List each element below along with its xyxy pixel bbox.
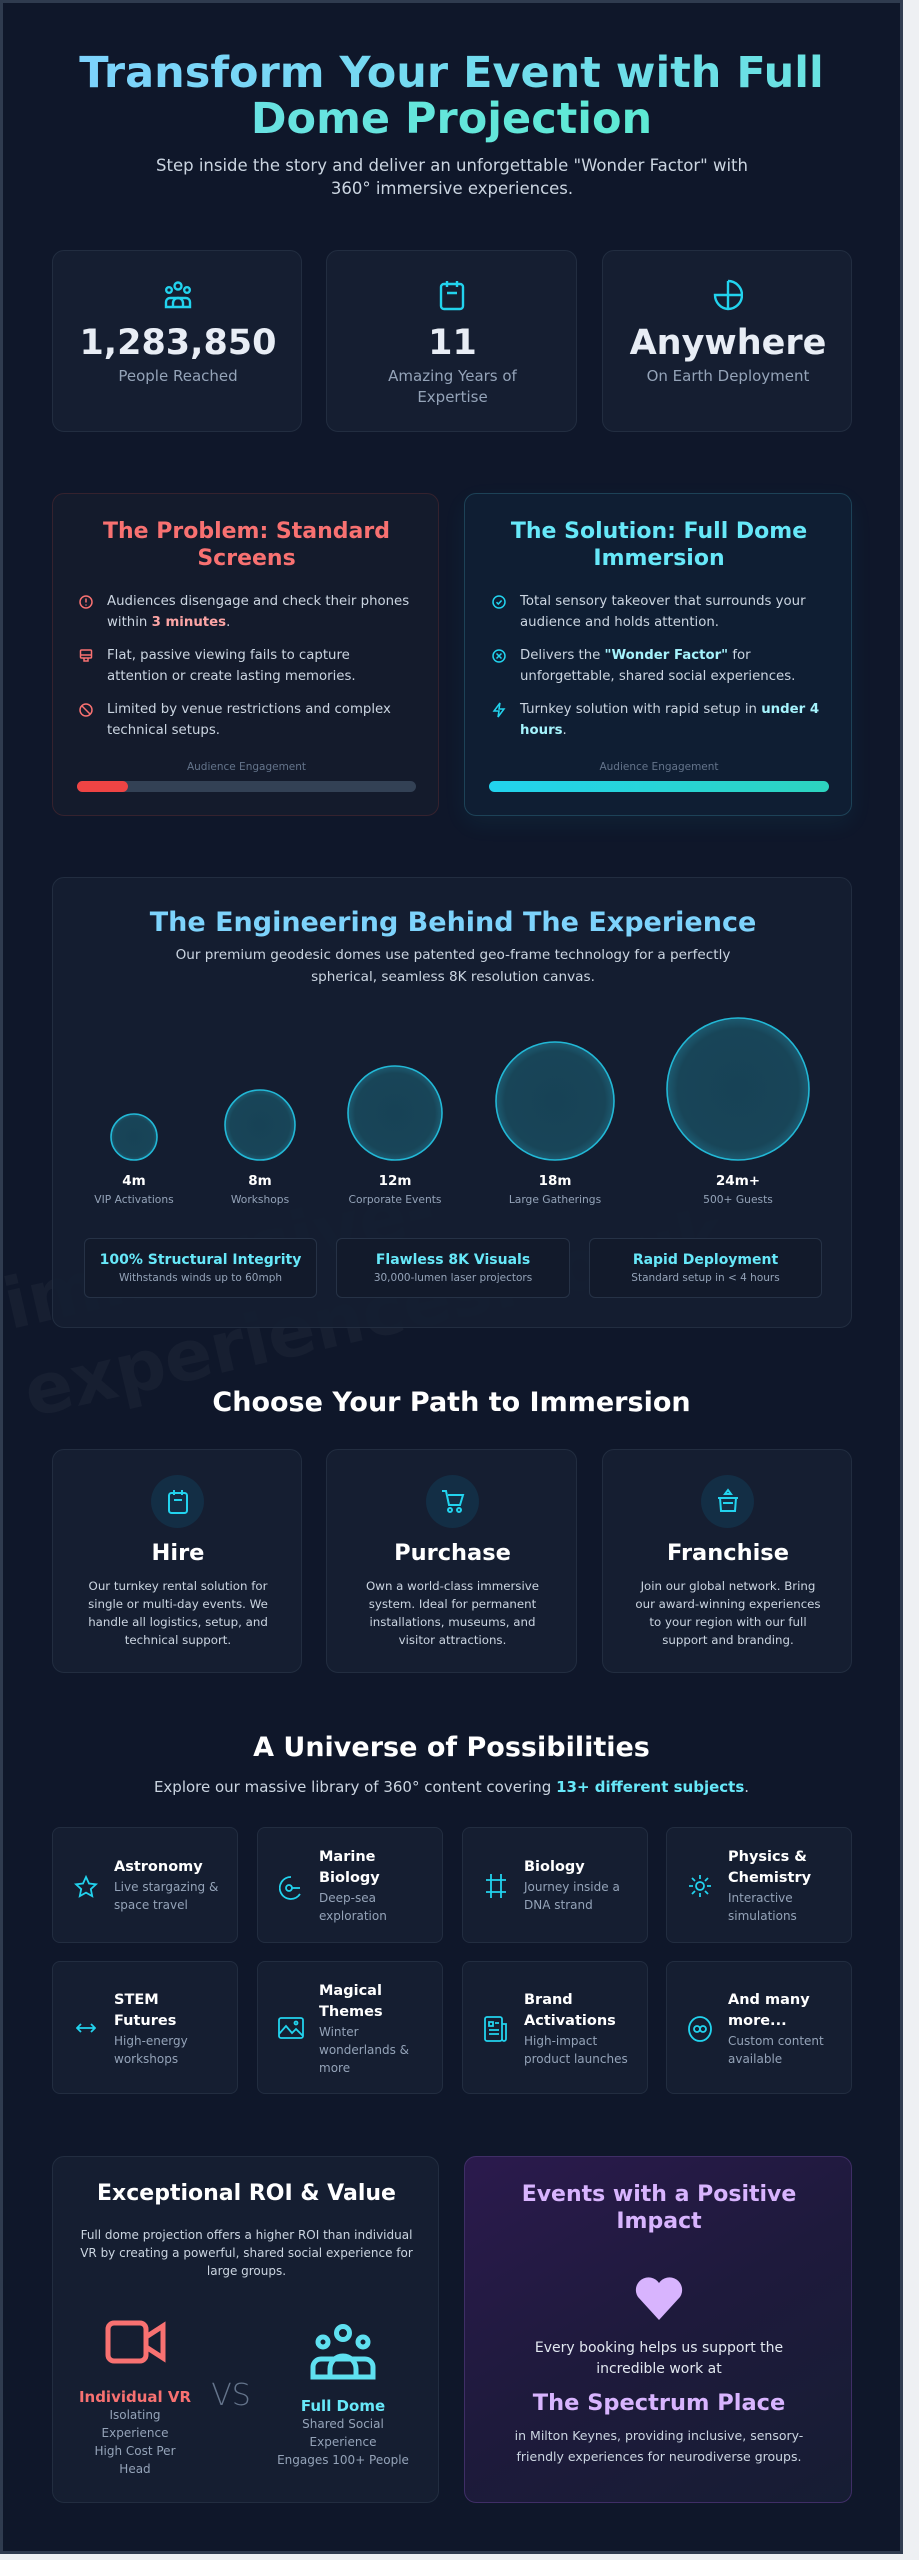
description: in Milton Keynes, providing inclusive, sensory- xyxy=(515,2428,803,2443)
label: Amazing Years of Expertise xyxy=(388,367,517,406)
subject: magical themes: Winter xyxy=(319,2025,359,2039)
title: Dome Projection xyxy=(251,94,652,144)
label: People Reached xyxy=(118,367,238,385)
number: 11 xyxy=(428,323,477,363)
subtitle xyxy=(156,156,748,198)
dome size chart: Corporate Events xyxy=(348,1193,442,1206)
feature: visuals xyxy=(336,1238,570,1298)
description: friendly experiences for neurodiverse groups. xyxy=(516,2449,801,2464)
description xyxy=(635,1579,821,1647)
description xyxy=(515,2428,803,2464)
icon: heart xyxy=(636,2277,682,2320)
engagement bar: Audience Engagement xyxy=(187,761,306,773)
subject: physics xyxy=(666,1827,852,1943)
item 1: Audiences disengage and check their phones within 3 minutes. xyxy=(107,594,409,630)
subject: brand activations: product launches xyxy=(524,2052,628,2066)
title: Franchise xyxy=(667,1540,789,1566)
comparison: individual vr: Isolating Experience xyxy=(102,2408,168,2440)
description: Our turnkey rental solution for single or multi-day events. We handle all logistics, setup, and technical support. xyxy=(88,1579,268,1647)
subject: many more: And many xyxy=(728,1992,810,2008)
text: incredible work at xyxy=(596,2361,722,2377)
panel: solution xyxy=(464,493,852,816)
title: Transform Your Event with Full xyxy=(79,48,824,98)
subject: magical themes: more xyxy=(319,2061,350,2075)
item 2 xyxy=(80,648,356,684)
subtitle: spherical, seamless 8K resolution canvas. xyxy=(311,969,595,985)
watermark: immersive- xyxy=(0,1167,443,1346)
heading: Events with a Positive xyxy=(522,2182,796,2207)
dome size chart: VIP Activations xyxy=(94,1193,174,1206)
comparison: individual vr: Individual VR xyxy=(79,2388,191,2406)
description: Join our global network. Bring xyxy=(641,1579,815,1593)
engagement bar: Audience Engagement xyxy=(599,761,719,773)
comparison: full dome: Engages 100+ People xyxy=(277,2453,409,2467)
subject: brand activations: Activations xyxy=(524,2013,616,2029)
text xyxy=(535,2340,783,2377)
subject: many more xyxy=(666,1961,852,2094)
text: Every booking helps us support the xyxy=(535,2340,783,2356)
description: our award-winning experiences xyxy=(635,1597,821,1611)
dome size chart xyxy=(94,1017,810,1206)
subtitle: Step inside the story and deliver an unforgettable "Wonder Factor" with xyxy=(156,156,748,175)
dome size chart: 18m xyxy=(539,1173,571,1189)
comparison: full dome: Shared Social xyxy=(302,2417,384,2431)
subject: physics: Chemistry xyxy=(728,1870,811,1886)
feature: visuals: Flawless 8K Visuals xyxy=(376,1252,530,1268)
heading xyxy=(522,2182,796,2234)
dome size chart: 4m xyxy=(122,1173,146,1189)
subject: stem xyxy=(52,1961,238,2094)
heading: The Solution: Full Dome Immersion xyxy=(511,519,807,571)
vs: VS xyxy=(211,2378,251,2413)
comparison: full dome xyxy=(277,2324,409,2467)
subject: biology: Biology xyxy=(524,1859,585,1875)
subject: many more: more... xyxy=(728,2013,787,2029)
stat card: anywhere xyxy=(602,250,852,432)
item 2: Flat, passive viewing fails to capture xyxy=(107,648,350,663)
organisation name: The Spectrum Place xyxy=(533,2390,785,2416)
card: hire xyxy=(52,1449,302,1673)
comparison: individual vr: High Cost Per Head xyxy=(94,2444,176,2476)
heading: The Engineering Behind The Experience xyxy=(150,907,756,938)
icon: people xyxy=(164,281,192,308)
feature: structural: 100% Structural Integrity xyxy=(100,1252,301,1268)
number: 1,283,850 xyxy=(79,323,277,363)
subject: physics: Interactive simulations xyxy=(728,1891,797,1923)
item 2: Delivers the "Wonder Factor" for unforgettable, shared social experiences. xyxy=(520,648,795,684)
heading: The Problem: Standard Screens xyxy=(103,519,390,571)
title: Hire xyxy=(152,1540,204,1566)
description: to your region with our full xyxy=(649,1615,807,1629)
subject: astronomy xyxy=(52,1827,238,1943)
panel: positive impact xyxy=(464,2156,852,2503)
icon: calendar xyxy=(440,281,464,310)
subtitle: universe: Explore our massive library of 360° content covering 13+ different subjects. xyxy=(154,1778,749,1796)
card: franchise xyxy=(602,1449,852,1673)
description: large groups. xyxy=(207,2264,286,2278)
title xyxy=(79,48,824,144)
subject: marine biology: Marine xyxy=(319,1849,376,1865)
subtitle: 360° immersive experiences. xyxy=(331,179,573,198)
subtitle xyxy=(176,947,730,985)
subject: marine biology xyxy=(257,1827,443,1943)
subject: stem: Futures xyxy=(114,2013,176,2029)
feature: structural xyxy=(84,1238,317,1298)
dome size chart: 500+ Guests xyxy=(703,1193,773,1206)
subject: astronomy: Astronomy xyxy=(114,1859,203,1875)
feature: deployment: Rapid Deployment xyxy=(633,1252,778,1268)
subject: magical themes xyxy=(257,1961,443,2094)
description: Own a world-class immersive system. Ideal for permanent installations, museums, and visitor attractions. xyxy=(366,1579,539,1647)
icon: calendar xyxy=(151,1475,204,1528)
dome size chart: 12m xyxy=(379,1173,411,1189)
heading: universe: A Universe of Possibilities xyxy=(253,1732,650,1763)
description: Full dome projection offers a higher ROI than individual xyxy=(81,2228,412,2242)
engagement bar xyxy=(489,761,829,792)
subject: astronomy: Live stargazing & space travel xyxy=(114,1880,218,1912)
description: VR by creating a powerful, shared social experience for xyxy=(80,2246,413,2260)
feature: structural: Withstands winds up to 60mph xyxy=(119,1272,282,1284)
icon: globe xyxy=(714,280,743,310)
panel: engineering xyxy=(52,877,852,1328)
dome size chart: Large Gatherings xyxy=(509,1193,601,1206)
item 1: Total sensory takeover that surrounds your audience and holds attention. xyxy=(520,594,806,630)
comparison: full dome: Experience xyxy=(310,2435,376,2449)
subject: brand activations: Brand xyxy=(524,1992,573,2008)
watermark: experiences.co.uk xyxy=(16,1193,732,1433)
dome size chart: Workshops xyxy=(231,1193,289,1206)
subject: magical themes: wonderlands & xyxy=(319,2043,409,2057)
description: support and branding. xyxy=(662,1633,794,1647)
item 2: attention or create lasting memories. xyxy=(107,669,356,684)
subject: magical themes: Themes xyxy=(319,2004,383,2020)
description xyxy=(80,2228,413,2278)
item 3: Turnkey solution with rapid setup in under 4 hours. xyxy=(520,702,819,738)
feature: visuals: 30,000-lumen laser projectors xyxy=(374,1272,532,1284)
dome size chart: 8m xyxy=(248,1173,272,1189)
subject: stem: High-energy workshops xyxy=(114,2034,188,2066)
item 3: Limited by venue restrictions and complex technical setups. xyxy=(107,702,391,738)
dome size chart: 24m+ xyxy=(716,1173,760,1189)
title: Purchase xyxy=(394,1540,511,1566)
panel: roi xyxy=(52,2156,439,2503)
comparison: individual vr xyxy=(79,2320,191,2476)
subject: marine biology: Biology xyxy=(319,1870,380,1886)
subtitle: Our premium geodesic domes use patented geo-frame technology for a perfectly xyxy=(176,947,730,963)
number: Anywhere xyxy=(630,323,826,363)
subject: brand activations: High-impact xyxy=(524,2034,597,2048)
feature: deployment xyxy=(589,1238,822,1298)
heading: Impact xyxy=(616,2209,702,2234)
subject: stem: STEM xyxy=(114,1992,159,2008)
comparison: full dome: Full Dome xyxy=(301,2397,385,2415)
feature: deployment: Standard setup in < 4 hours xyxy=(631,1272,780,1284)
panel: problem xyxy=(52,493,439,816)
subject: many more: Custom content xyxy=(728,2034,824,2048)
subject: many more: available xyxy=(728,2052,782,2066)
stat card: years xyxy=(326,250,577,432)
subject: physics: Physics & xyxy=(728,1849,807,1865)
subject: brand activations xyxy=(462,1961,648,2094)
watermark xyxy=(0,1037,919,1437)
icon: cart xyxy=(426,1475,479,1528)
card: purchase xyxy=(326,1449,577,1673)
subject: magical themes: Magical xyxy=(319,1983,382,1999)
subject: biology: Journey inside a DNA strand xyxy=(524,1880,620,1912)
heading: Exceptional ROI & Value xyxy=(97,2181,396,2206)
subject: biology xyxy=(462,1827,648,1943)
heading: choose path: Choose Your Path to Immersion xyxy=(212,1387,691,1418)
stat card: people xyxy=(52,250,302,432)
engagement bar xyxy=(77,761,416,792)
icon: basket xyxy=(701,1475,754,1528)
subject: marine biology: Deep-sea exploration xyxy=(319,1891,387,1923)
label: On Earth Deployment xyxy=(647,367,809,385)
